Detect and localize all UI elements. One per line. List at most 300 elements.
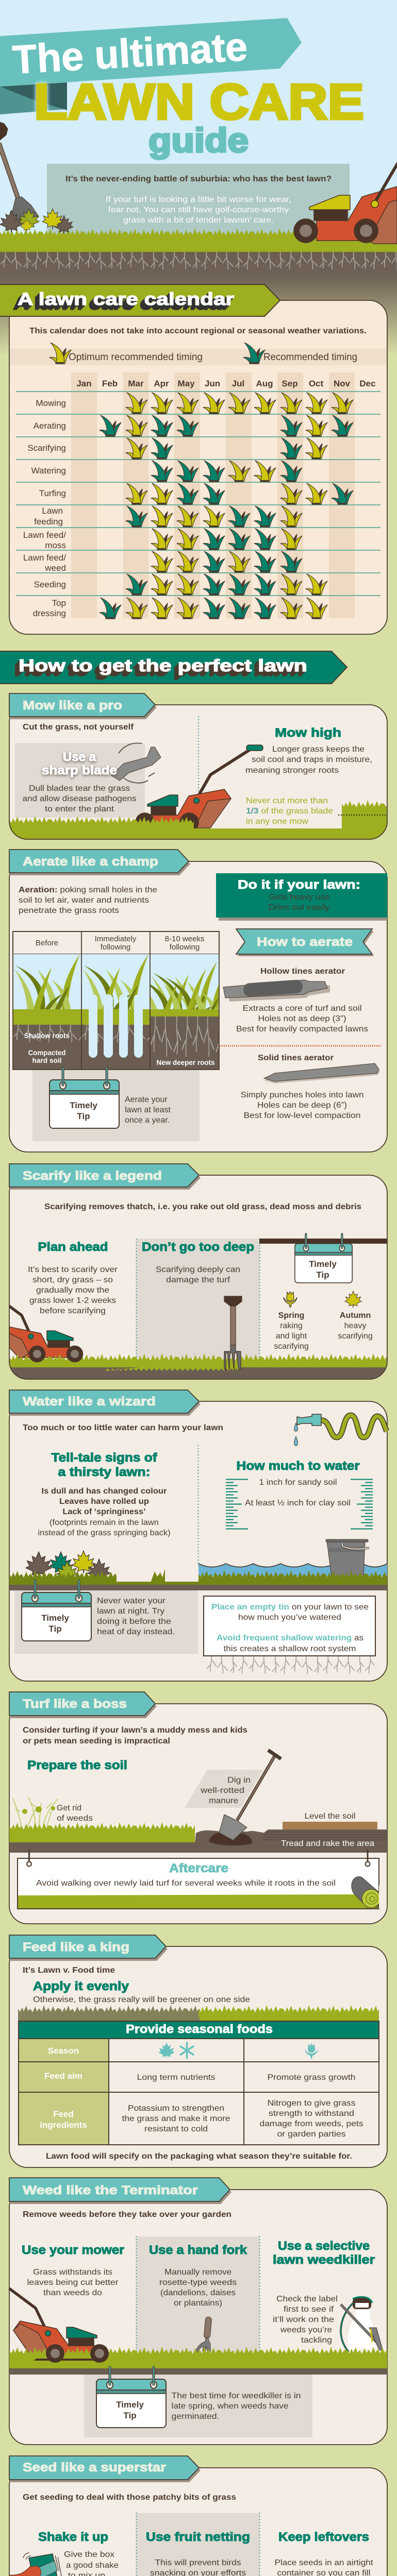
heading: how to get the perfect lawn: How to get the perfect lawn bbox=[19, 656, 307, 675]
dry and healthy grass bbox=[9, 1569, 387, 1590]
panel: scarify like a legend bbox=[8, 1164, 388, 1380]
timing icons: lawn feeding bbox=[126, 506, 302, 527]
solid tines aerator: Best for low-level compaction bbox=[243, 1111, 361, 1120]
seed heading: Seed like a superstar bbox=[23, 2461, 166, 2475]
prepare the soil heading: Prepare the soil bbox=[27, 1758, 127, 1772]
timely tip: water: lawn at night. Try bbox=[97, 1607, 164, 1616]
turf panel background bbox=[9, 1704, 387, 1924]
get rid of weeds text: Get rid bbox=[57, 1804, 81, 1812]
thirsty lawn list: (footprints remain in the lawn bbox=[49, 1518, 159, 1527]
weed panel background bbox=[9, 2190, 387, 2445]
get rid of weeds text: of weeds bbox=[57, 1814, 93, 1823]
panel: mow like a pro bbox=[9, 693, 388, 841]
column headings bbox=[38, 2530, 369, 2544]
mow panel background bbox=[9, 705, 387, 839]
empty tin advice: Avoid frequent shallow watering as bbox=[217, 1634, 363, 1642]
plan ahead text: grass lower 1-2 weeks bbox=[29, 1296, 116, 1305]
row labels: Watering bbox=[31, 466, 66, 476]
dividers bbox=[136, 2513, 260, 2576]
timely tip: aerate: lawn at least bbox=[125, 1106, 171, 1114]
aerate panel background bbox=[9, 861, 387, 1152]
timing icons: mowing bbox=[126, 393, 353, 414]
calendar panel background bbox=[9, 300, 387, 634]
column: 8-10 weeks following: New deeper roots bbox=[157, 1058, 215, 1066]
intro text bbox=[106, 195, 291, 225]
weedkiller text: Check the label bbox=[276, 2295, 338, 2303]
dividers bbox=[136, 2236, 260, 2352]
row: feed ingredients: Nitrogen to give grass bbox=[267, 2099, 356, 2108]
row: feed aim: Long term nutrients bbox=[137, 2073, 216, 2082]
icon: hand shaking seed box bbox=[9, 2553, 62, 2576]
feed heading bbox=[9, 1935, 168, 1961]
thirsty lawn list: instead of the grass springing back) bbox=[38, 1529, 170, 1537]
hollow tines aerator: Extracts a core of turf and soil bbox=[242, 1004, 362, 1013]
table header bbox=[19, 2021, 379, 2039]
icon: solid tine bbox=[264, 1063, 380, 1083]
empty tin advice: Place an empty tin on your lawn to see bbox=[211, 1603, 369, 1612]
water heading: Water like a wizard bbox=[23, 1395, 156, 1409]
timing icons: top dressing bbox=[100, 598, 327, 619]
month labels: Sep bbox=[282, 379, 298, 388]
seed panel border bbox=[9, 2468, 387, 2576]
grass and soil strip bbox=[9, 2347, 387, 2375]
one third rule: 1/3 of the grass blade bbox=[246, 807, 333, 816]
intro question: It’s the never-ending battle of suburbia: who has the best lawn? bbox=[65, 175, 332, 183]
uneven lawn strip bbox=[18, 2005, 379, 2021]
row lines bbox=[16, 392, 381, 596]
icon: mower blade bbox=[111, 743, 161, 783]
solid tines aerator: Holes can be deep (6”) bbox=[257, 1101, 347, 1110]
timely tip: water bbox=[22, 1580, 175, 1641]
column: before bbox=[13, 954, 81, 1070]
timing icons: watering bbox=[151, 461, 302, 482]
mow high text: meaning stronger roots bbox=[245, 766, 339, 775]
spring advice: scarifying bbox=[274, 1342, 309, 1351]
timely tip: aerate: once a year. bbox=[125, 1116, 170, 1125]
intro text: grass with a bit of tender lawnin’ care. bbox=[123, 216, 274, 225]
timely tip: aerate: Timely bbox=[70, 1100, 97, 1110]
mow high text: soil cool and traps in moisture, bbox=[252, 755, 372, 764]
manure callout bbox=[185, 1770, 263, 1808]
weedkiller text: tackling bbox=[301, 2336, 332, 2345]
month labels: Apr bbox=[154, 379, 169, 388]
sharp blade heading: Use a bbox=[63, 750, 96, 764]
thirsty lawn heading: Tell-tale signs of bbox=[52, 1451, 158, 1465]
timing icons: seeding bbox=[126, 574, 327, 595]
mower text: than weeds do bbox=[43, 2289, 102, 2297]
row: feed ingredients: or garden parties bbox=[277, 2130, 345, 2139]
mow intro: Cut the grass, not yourself bbox=[23, 723, 134, 732]
aeration definition: Aeration: poking small holes in the bbox=[19, 886, 157, 894]
thirsty lawn heading: a thirsty lawn: bbox=[58, 1465, 151, 1479]
icon: mower bbox=[8, 1305, 77, 1359]
solid tines aerator: Solid tines aerator bbox=[258, 1054, 334, 1062]
column: immediately following bbox=[81, 954, 150, 1070]
month columns bbox=[71, 372, 355, 618]
thirsty lawn list bbox=[38, 1487, 170, 1537]
mow heading bbox=[9, 693, 157, 719]
table header: Provide seasonal foods bbox=[126, 2022, 273, 2036]
mow high text: Longer grass keeps the bbox=[272, 745, 365, 754]
mow high text bbox=[245, 745, 372, 775]
solid tines aerator: Simply punches holes into lawn bbox=[240, 1091, 364, 1099]
month labels bbox=[76, 379, 376, 388]
divider bbox=[197, 1445, 199, 1566]
legend: Recommended timing bbox=[263, 352, 357, 363]
weed heading bbox=[9, 2178, 231, 2204]
water panel background bbox=[9, 1401, 387, 1681]
panel: feed like a king bbox=[9, 1935, 387, 2167]
do it if your lawn box bbox=[216, 873, 387, 921]
seed intro: Get seeding to deal with those patchy bits of grass bbox=[23, 2493, 236, 2502]
seed panel background bbox=[9, 2468, 387, 2576]
cut and uncut grass bbox=[9, 800, 388, 841]
plan ahead text bbox=[28, 1265, 118, 1315]
row labels: Seeding bbox=[34, 580, 66, 589]
weedkiller text bbox=[273, 2295, 338, 2345]
water depth gauge: At least ½ inch for clay soil bbox=[245, 1499, 351, 1507]
hand fork text bbox=[159, 2268, 237, 2308]
thirsty lawn list: Leaves have rolled up bbox=[59, 1497, 149, 1506]
row headers: ingredients bbox=[40, 2120, 87, 2130]
timely tip: scarify bbox=[295, 1233, 352, 1283]
row labels: weed bbox=[44, 563, 66, 573]
timely tip: scarify: Tip bbox=[316, 1270, 329, 1280]
sharp blade text: Dull blades tear the grass bbox=[29, 784, 130, 793]
seed heading bbox=[9, 2456, 201, 2482]
month labels: May bbox=[177, 379, 195, 388]
scarify heading bbox=[9, 1164, 201, 1190]
timely tip: weed: The best time for weedkiller is in bbox=[171, 2392, 301, 2400]
column: before: hard soil bbox=[32, 1056, 62, 1064]
turf intro: or pets mean seeding is impractical bbox=[23, 1737, 170, 1745]
lawn strip with roots bbox=[0, 228, 397, 270]
aeration definition bbox=[19, 886, 157, 915]
hollow tines aerator: Best for heavily compacted lawns bbox=[236, 1025, 368, 1033]
sharp blade heading: sharp blade bbox=[42, 764, 117, 777]
row headers: Feed aim bbox=[44, 2071, 82, 2081]
solid tines aerator bbox=[240, 1054, 380, 1120]
empty tin advice: how much you’ve watered bbox=[238, 1613, 341, 1622]
level the soil bbox=[283, 1812, 377, 1829]
row: feed ingredients: resistant to cold bbox=[144, 2125, 208, 2133]
timely tip: weed bbox=[96, 2366, 301, 2428]
sharp blade text bbox=[23, 784, 136, 814]
aeration definition: penetrate the grass roots bbox=[19, 906, 119, 915]
scarify panel background bbox=[9, 1175, 387, 1379]
feed note: Lawn food will specify on the packaging what season they’re suitable for. bbox=[46, 2152, 352, 2161]
row labels: moss bbox=[45, 540, 66, 550]
one third rule bbox=[246, 796, 333, 826]
hanging bar bbox=[259, 1239, 387, 1244]
aerate heading: Aerate like a champ bbox=[23, 855, 158, 869]
month labels: Jul bbox=[232, 379, 244, 388]
heading: how to get the perfect lawn bbox=[0, 651, 347, 684]
feed heading: Feed like a king bbox=[23, 1940, 129, 1954]
thirsty lawn list: Is dull and has changed colour bbox=[41, 1487, 167, 1496]
month labels: Nov bbox=[334, 379, 351, 388]
hollow tines aerator bbox=[223, 967, 368, 1033]
row labels: feeding bbox=[34, 517, 63, 527]
table grid bbox=[19, 2021, 379, 2145]
row labels: dressing bbox=[33, 608, 66, 618]
turf heading bbox=[9, 1692, 157, 1718]
diagram frame bbox=[13, 931, 219, 1070]
timely tip: scarify: Timely bbox=[309, 1259, 337, 1269]
timing icons: lawn feed weed bbox=[151, 551, 302, 572]
panel: water like a wizard bbox=[9, 1390, 387, 1681]
row headers: Season bbox=[48, 2046, 79, 2056]
diagram header row bbox=[13, 931, 219, 954]
intro box bbox=[47, 164, 350, 236]
column headings: Use your mower bbox=[22, 2243, 124, 2257]
spring advice: raking bbox=[280, 1321, 303, 1330]
sharp blade heading bbox=[42, 750, 117, 777]
title bbox=[0, 18, 364, 159]
row labels: Turfing bbox=[39, 488, 66, 498]
tread and rake text: Tread and rake the area bbox=[281, 1839, 374, 1848]
panel: aerate like a champ bbox=[9, 850, 387, 1152]
hollow tines aerator: Hollow tines aerator bbox=[260, 967, 345, 976]
icon: mower bbox=[136, 745, 263, 832]
weedkiller text: it’ll work on the bbox=[273, 2315, 334, 2324]
column headings: Shake it up bbox=[38, 2530, 108, 2544]
how to aerate banner bbox=[236, 929, 374, 956]
column headings: Use a hand fork bbox=[149, 2243, 247, 2257]
column: before: Compacted bbox=[28, 1048, 66, 1057]
dividers bbox=[136, 1239, 260, 1358]
legend bbox=[10, 343, 387, 365]
row: feed ingredients: Potassium to strengthen bbox=[128, 2104, 224, 2113]
month labels: Dec bbox=[359, 379, 376, 388]
timely tip: weed: late spring, when weeds have bbox=[171, 2402, 289, 2411]
panel: seed like a superstar bbox=[9, 2456, 388, 2576]
month labels: Aug bbox=[256, 379, 273, 388]
panel: lawn care calendar bbox=[0, 284, 387, 634]
icon: lawn mower bbox=[294, 163, 397, 244]
aerate heading bbox=[9, 850, 190, 875]
mow high heading: Mow high bbox=[275, 726, 341, 740]
don't go too deep text: Scarifying deeply can bbox=[156, 1265, 240, 1274]
don't go too deep text bbox=[156, 1265, 240, 1284]
icon: hollow tines bbox=[223, 979, 330, 1002]
column headings: Keep leftovers bbox=[278, 2530, 369, 2544]
row headers: Feed bbox=[53, 2109, 74, 2119]
row labels: Scarifying bbox=[27, 443, 66, 453]
icon: spade in manure bbox=[209, 1750, 281, 1845]
column headings: Use fruit netting bbox=[146, 2530, 250, 2544]
autumn advice bbox=[338, 1291, 373, 1341]
column: fruit netting backing bbox=[136, 2513, 260, 2576]
row labels: Lawn feed/ bbox=[23, 553, 66, 563]
timing icons: lawn feed moss bbox=[151, 529, 302, 550]
leftovers text bbox=[274, 2558, 373, 2576]
water intro: Too much or too little water can harm your lawn bbox=[23, 1423, 223, 1432]
column headings bbox=[22, 2239, 375, 2267]
divider bbox=[220, 1045, 381, 1046]
intro text: fear not. You can still have golf-course-worthy bbox=[108, 206, 289, 214]
ribbon bbox=[0, 18, 302, 87]
timing icons: aerating bbox=[100, 415, 353, 436]
title line: The ultimate: The ultimate bbox=[11, 24, 249, 82]
turf intro bbox=[23, 1726, 247, 1745]
plan ahead text: It’s best to scarify over bbox=[28, 1265, 118, 1274]
weedkiller text: weeds you’re bbox=[280, 2326, 332, 2334]
roots bbox=[206, 1656, 376, 1675]
water depth gauge: 1 inch for sandy soil bbox=[259, 1478, 337, 1487]
aeration definition: soil to let air, water and nutrients bbox=[19, 896, 149, 905]
row labels: Lawn bbox=[42, 506, 63, 516]
icon: mower bbox=[9, 2289, 106, 2361]
apply evenly text: Otherwise, the grass really will be greener on one side bbox=[33, 1995, 250, 2004]
apply evenly heading: Apply it evenly bbox=[33, 1979, 129, 1993]
row labels: Mowing bbox=[36, 398, 66, 408]
level the soil: Level the soil bbox=[304, 1812, 356, 1821]
timely tip: aerate bbox=[49, 1067, 171, 1128]
row labels: Aerating bbox=[34, 421, 66, 431]
hand fork text: rosette-type weeds bbox=[159, 2278, 237, 2287]
mower wheels bbox=[34, 2344, 109, 2363]
plan ahead text: short, dry grass – so bbox=[32, 1276, 113, 1284]
timely tip: aerate: Tip bbox=[77, 1111, 90, 1121]
column: hand fork backing bbox=[136, 2236, 260, 2352]
get rid of weeds text bbox=[57, 1804, 93, 1823]
thirsty lawn list: Lack of ‘springiness’ bbox=[63, 1507, 145, 1516]
timely tip: weed: Timely bbox=[116, 2400, 144, 2410]
do it if your lawn box: Do it if your lawn: bbox=[238, 878, 360, 892]
leftovers text: Place seeds in an airtight bbox=[274, 2558, 373, 2567]
ribbon fold bbox=[0, 82, 67, 114]
icon: garden fork bbox=[224, 1296, 242, 1370]
icon: leaf pile bbox=[26, 1551, 110, 1582]
row: feed ingredients: strength to withstand bbox=[269, 2109, 354, 2118]
tip backing box bbox=[14, 1590, 198, 1654]
mow panel border bbox=[9, 705, 387, 839]
how to aerate banner: How to aerate bbox=[257, 935, 353, 949]
aftercare sign: Aftercare bbox=[169, 1861, 228, 1875]
don't go too deep text: damage the turf bbox=[166, 1276, 230, 1284]
spring advice: Spring bbox=[278, 1311, 304, 1320]
sharp blade text: to enter the plant bbox=[45, 805, 114, 814]
scarify intro: Scarifying removes thatch, i.e. you rake out old grass, dead moss and debris bbox=[44, 1202, 361, 1211]
row: feed ingredients bbox=[122, 2099, 363, 2139]
timing icons: turfing bbox=[126, 483, 353, 504]
weedkiller text: first to see if bbox=[284, 2305, 334, 2314]
month labels: Jan bbox=[76, 379, 92, 388]
icon: bucket bbox=[326, 1539, 369, 1577]
timely tip: weed: Tip bbox=[123, 2411, 137, 2420]
timely tip: aerate: Aerate your bbox=[125, 1095, 168, 1104]
column: 8-10 weeks following bbox=[151, 954, 219, 1070]
month labels: Feb bbox=[102, 379, 118, 388]
manure callout: well-rotted bbox=[200, 1786, 244, 1795]
row: feed aim: Promote grass growth bbox=[267, 2073, 356, 2082]
empty tin advice bbox=[204, 1596, 375, 1656]
mower text bbox=[27, 2268, 119, 2297]
autumn advice: heavy bbox=[344, 1321, 366, 1330]
row: feed ingredients: the grass and make it more bbox=[122, 2114, 230, 2123]
row: feed ingredients: damage from weeds, pets bbox=[260, 2120, 363, 2128]
hand fork text: (dandelions, daises bbox=[160, 2289, 236, 2297]
manure callout: Dig in bbox=[227, 1776, 251, 1785]
timely tip: weed: germinated. bbox=[171, 2412, 220, 2421]
do it if your lawn box: Dries out easily bbox=[269, 903, 329, 912]
grass and soil bbox=[9, 1822, 387, 1853]
thirsty lawn heading bbox=[52, 1451, 158, 1479]
one third rule: Never cut more than bbox=[246, 796, 328, 805]
mower text: Grass withstands its bbox=[33, 2268, 112, 2277]
row headers bbox=[40, 2046, 87, 2130]
fruit netting text bbox=[150, 2558, 246, 2576]
manure callout: manure bbox=[209, 1797, 238, 1805]
sharp blade text: and allow disease pathogens bbox=[23, 794, 136, 803]
icon: turf roll bbox=[352, 1876, 387, 1909]
mower text: leaves being cut better bbox=[27, 2278, 119, 2287]
season icons bbox=[158, 2042, 318, 2059]
water level and bucket bbox=[198, 1539, 387, 1577]
row labels bbox=[23, 398, 66, 618]
feed intro: It’s Lawn v. Food time bbox=[23, 1966, 115, 1975]
panel: turf like a boss bbox=[9, 1692, 387, 1924]
title line: guide: guide bbox=[148, 121, 249, 159]
icon: hand fork bbox=[195, 2317, 212, 2354]
spring advice: and light bbox=[276, 1332, 307, 1341]
timely tip: water: doing it before the bbox=[97, 1617, 171, 1626]
aftercare sign: Avoid walking over newly laid turf for several weeks while it roots in the soil bbox=[36, 1879, 336, 1888]
scarify panel border bbox=[9, 1175, 387, 1379]
column headings: Use a selective bbox=[278, 2239, 370, 2253]
plan ahead text: before scarifying bbox=[40, 1307, 106, 1315]
empty tin advice: this creates a shallow root system bbox=[224, 1645, 356, 1653]
mow heading: Mow like a pro bbox=[23, 699, 122, 713]
feed panel background bbox=[9, 1946, 387, 2167]
don't go too deep heading: Don’t go too deep bbox=[142, 1240, 254, 1254]
aftercare sign bbox=[18, 1850, 387, 1909]
shake text: a good shake bbox=[66, 2561, 119, 2570]
water depth gauge bbox=[226, 1478, 373, 1529]
icon: weeds bbox=[13, 1797, 58, 1830]
grass and soil strip bbox=[9, 1353, 388, 1380]
calendar heading bbox=[0, 284, 280, 316]
plan ahead text: gradually mow the bbox=[36, 1286, 109, 1295]
seasonal foods table bbox=[19, 2021, 379, 2145]
do it if your lawn box: Gets heavy use bbox=[269, 893, 329, 902]
title line: LAWN CARE: LAWN CARE bbox=[34, 74, 364, 130]
intro text: If your turf is looking a little bit worse for wear, bbox=[106, 195, 291, 204]
divider bbox=[198, 716, 199, 792]
plan ahead heading: Plan ahead bbox=[38, 1240, 108, 1254]
calendar note: This calendar does not take into account regional or seasonal weather variations. bbox=[29, 327, 367, 335]
aeration diagram bbox=[13, 931, 229, 1141]
column: don't go too deep backing bbox=[136, 1239, 260, 1358]
fruit netting text: This will prevent birds bbox=[155, 2558, 241, 2567]
diagram header row: following bbox=[170, 943, 200, 952]
timely tip: water: Tip bbox=[48, 1624, 62, 1634]
icon: garden fork and leaves bbox=[0, 122, 73, 234]
timing icons: scarifying bbox=[126, 438, 327, 459]
legend: Optimum recommended timing bbox=[69, 352, 203, 363]
sharp blade box bbox=[15, 743, 145, 818]
diagram header row: 8-10 weeks bbox=[165, 935, 204, 943]
month labels: Oct bbox=[309, 379, 324, 388]
hand fork text: Manually remove bbox=[164, 2268, 231, 2277]
diagram header row: following bbox=[101, 943, 130, 952]
scarify heading: Scarify like a legend bbox=[23, 1169, 162, 1183]
calendar heading: A lawn care calendar bbox=[18, 290, 234, 309]
weed heading: Weed like the Terminator bbox=[23, 2183, 198, 2197]
month labels: Mar bbox=[128, 379, 144, 388]
hand fork text: or plantains) bbox=[174, 2299, 222, 2308]
